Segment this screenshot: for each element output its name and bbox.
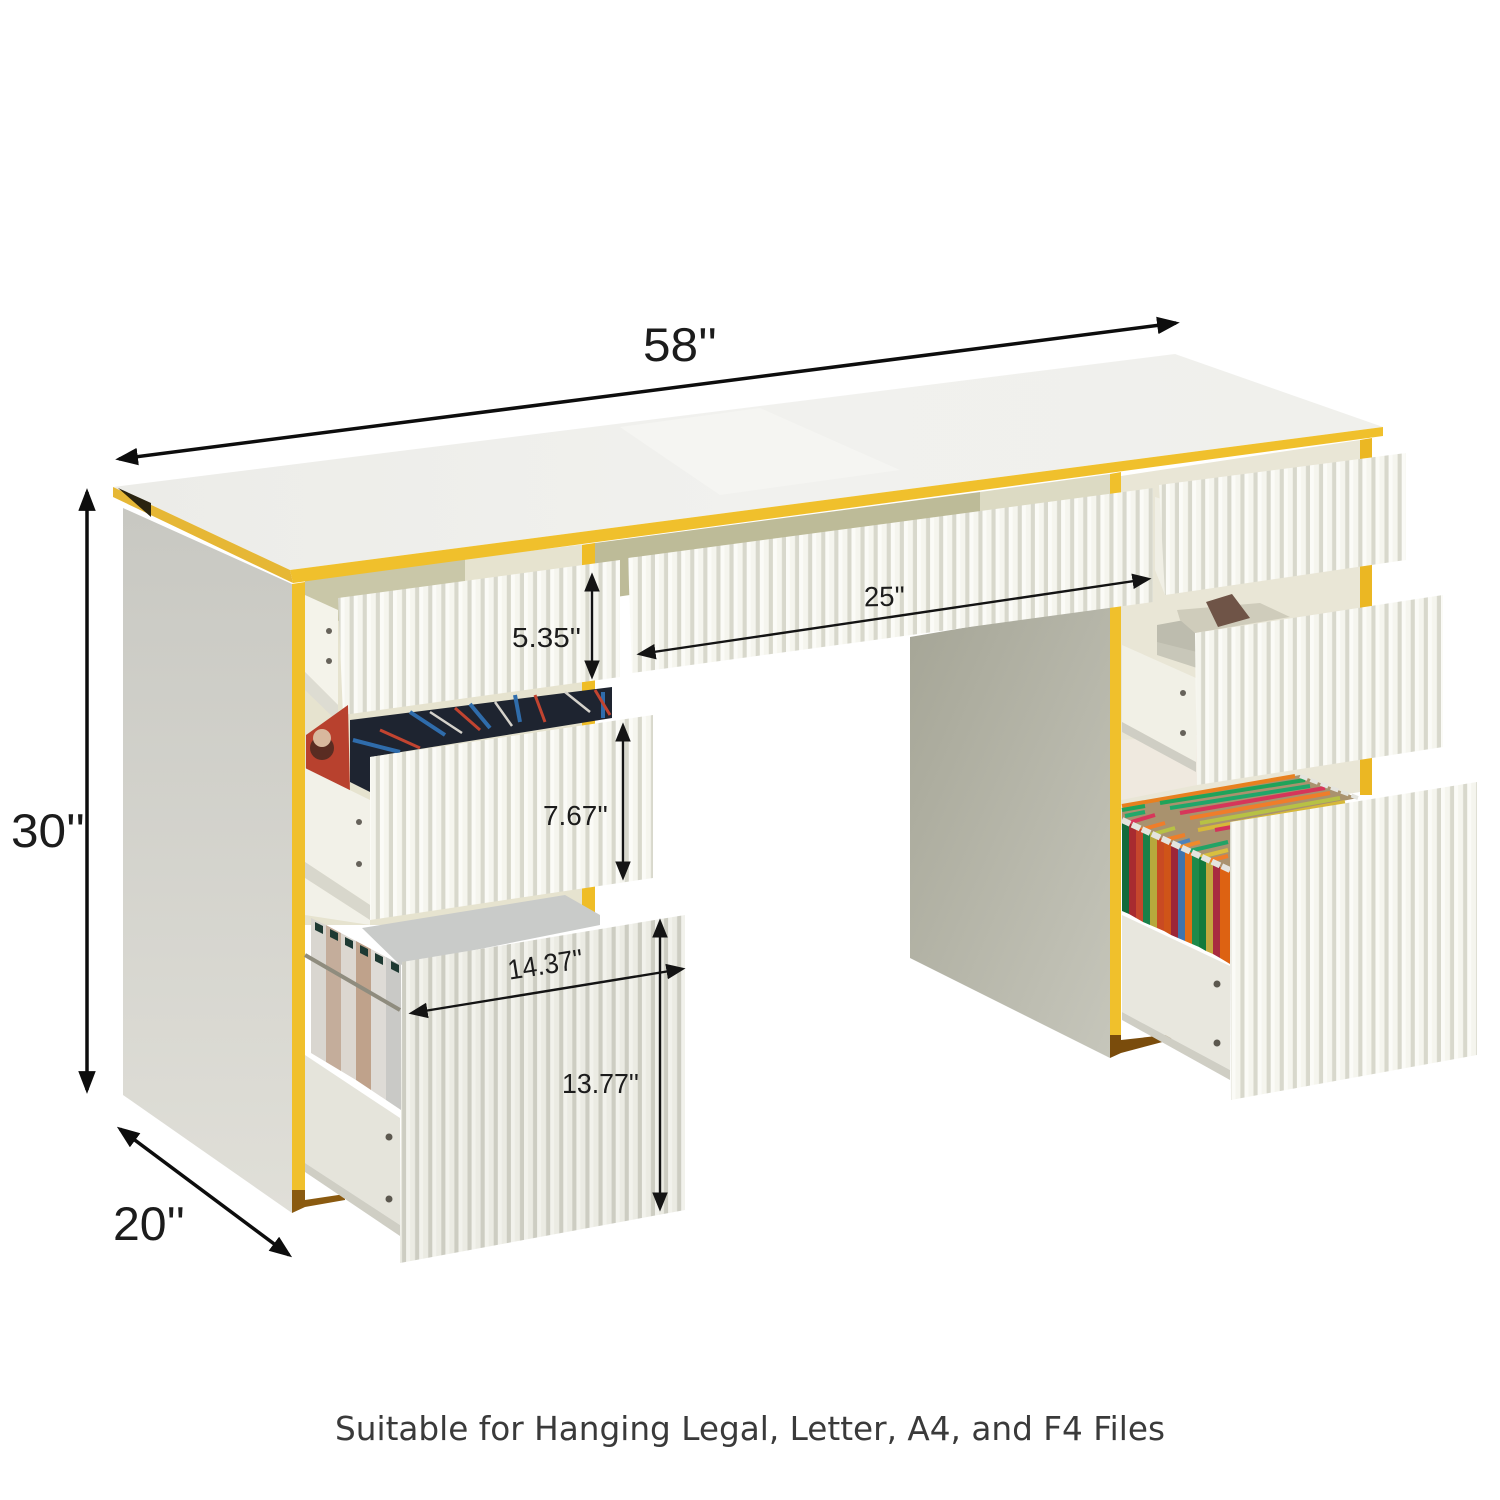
left pedestal side panel [123,508,292,1213]
label: 30 inches: 30'' [11,804,85,857]
label: 5.35 inches: 5.35'' [512,622,581,653]
desktop surface [113,354,1383,570]
arrow: top drawer height [591,576,593,676]
top right drawer [1155,453,1406,595]
books in second left drawer [306,687,612,792]
label: 7.67 inches: 7.67'' [543,800,608,831]
desk illustration [113,354,1477,1263]
second left drawer [305,715,653,925]
arrow: depth 20 [120,1129,289,1255]
desktop reflection [620,408,900,495]
top left drawer [305,560,620,722]
books and bag on right shelf [1157,594,1290,668]
center drawer [628,488,1153,673]
second right drawer [1122,595,1443,785]
gold trim posts [292,438,1372,1213]
label: 20 inches: 20'' [113,1197,185,1250]
gold desktop edge [113,427,1383,583]
caption: Suitable for Hanging Legal, Letter, A4, and F4 Files [335,1409,1165,1448]
right pedestal side panel [910,603,1110,1058]
label: 58 inches: 58'' [643,318,717,371]
label: 25 inches: 25'' [864,581,905,612]
label: 14.37 inches: 14.37'' [505,943,585,986]
label: 13.77 inches: 13.77'' [562,1068,639,1099]
arrow: file drawer height [659,922,661,1208]
arrow: width 58 [119,323,1176,459]
bottom left drawer [305,915,685,1263]
hanging files in bottom right drawer [1122,775,1358,964]
arrow: center drawer width [640,579,1148,654]
bottom right drawer [1122,782,1477,1100]
arrow: file drawer width [412,969,682,1013]
arrow: height 30 [85,492,89,1090]
cabinet interiors [305,440,1360,925]
binders in bottom left drawer [305,895,600,1110]
arrow: middle drawer height [622,726,624,877]
